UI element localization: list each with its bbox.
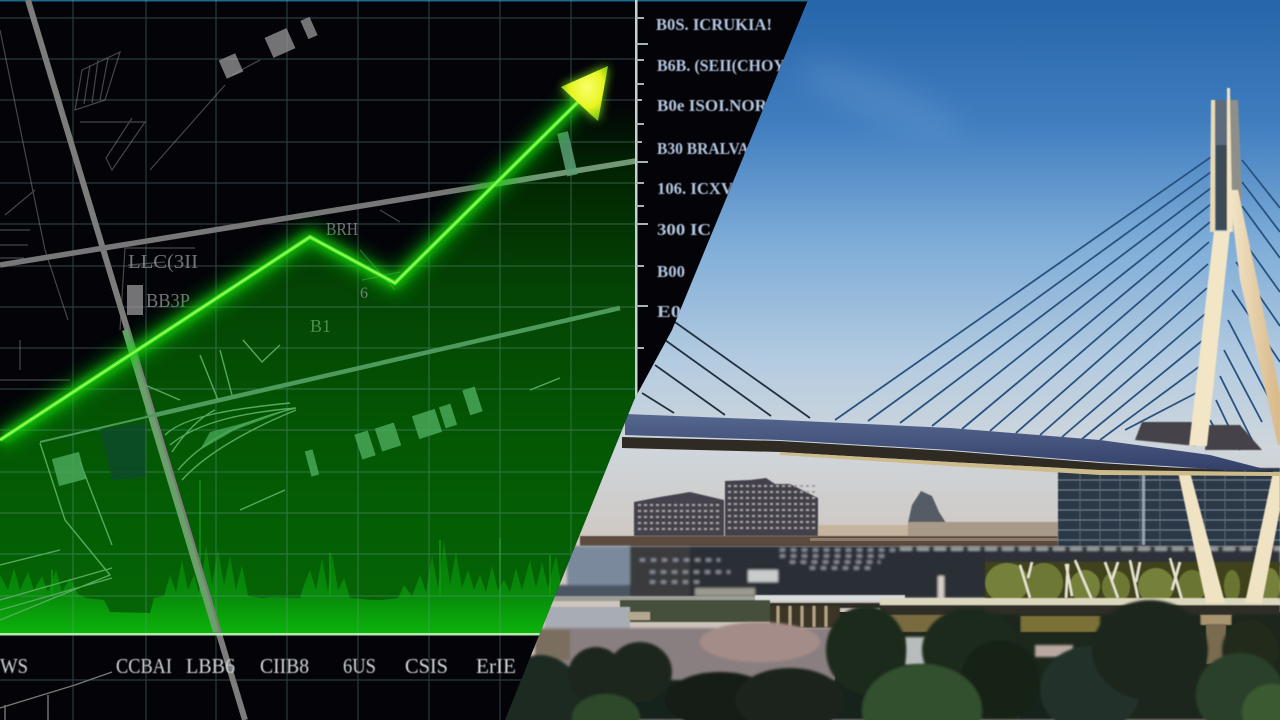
foreground tree canopy xyxy=(496,600,1280,720)
faint shaded wedge xyxy=(100,423,145,480)
river xyxy=(535,622,1073,682)
time axis labels: WS xyxy=(0,654,28,678)
axis value labels: E0 xyxy=(657,302,681,321)
growth line glow xyxy=(0,100,580,440)
sky xyxy=(500,0,1280,720)
glass office building xyxy=(1058,468,1280,546)
volume spectrum xyxy=(0,480,562,634)
sketched labels: BB3P xyxy=(146,290,190,312)
time axis labels: ErIE xyxy=(476,654,516,678)
time axis labels: CCBAI xyxy=(116,654,172,678)
bridge tower xyxy=(1178,88,1280,603)
green sketch blocks xyxy=(52,131,578,486)
bridge stay cables xyxy=(642,157,1280,450)
faint technical sketches xyxy=(0,30,400,380)
vertical chart axis xyxy=(635,0,648,410)
green sketch drawings xyxy=(0,340,560,620)
lower-left sketch line xyxy=(0,672,112,720)
distant apartment buildings xyxy=(634,478,1058,537)
time axis labels xyxy=(0,658,516,674)
crossing gray trend line xyxy=(0,161,636,265)
lit trees below the bridge xyxy=(985,558,1280,604)
axis value labels: B0S. ICRUKIA! xyxy=(656,15,772,34)
growth line wide glow xyxy=(0,100,580,440)
axis value labels: B30 BRALVA xyxy=(657,139,750,158)
time axis labels: CIIB8 xyxy=(260,654,309,678)
riverside buildings and tree line xyxy=(550,546,1280,599)
time axis labels: CSIS xyxy=(405,654,448,678)
panel: stock growth chart xyxy=(0,0,810,720)
sketched labels: BRH xyxy=(326,219,358,239)
waterfront band xyxy=(580,536,1058,546)
pier and waterfront walkway xyxy=(545,595,1280,664)
wispy cloud xyxy=(788,46,972,154)
sketched labels: LLC(3II xyxy=(128,251,198,273)
sketched labels: 6 xyxy=(360,285,368,302)
second crossing trend line xyxy=(155,308,620,415)
dark background xyxy=(495,0,808,720)
axis value labels: 106. ICXV xyxy=(657,179,734,198)
chart bottom axis xyxy=(0,633,545,636)
photo: bridge and city skyline xyxy=(496,0,1280,720)
diagonal gray axis line xyxy=(28,0,245,720)
axis value labels: B0e ISOI.NOR xyxy=(657,96,768,115)
axis value labels: B00 xyxy=(657,262,685,281)
time axis labels: 6US xyxy=(343,654,376,678)
arrow head xyxy=(561,66,608,121)
axis value labels: 300 IC xyxy=(657,220,711,239)
sketched labels xyxy=(127,17,368,336)
axis value labels: B6B. (SEII(CHOY xyxy=(657,56,785,75)
growth line xyxy=(0,100,580,440)
building seen behind deck xyxy=(1135,422,1262,450)
green area under growth line xyxy=(0,60,636,634)
time axis labels: LBB6 xyxy=(186,654,235,678)
dark tree base under walkway xyxy=(835,612,1280,692)
sketched labels: B1 xyxy=(310,316,331,336)
axis value labels xyxy=(656,15,785,321)
bridge deck xyxy=(622,414,1280,476)
chart grid xyxy=(0,0,636,720)
